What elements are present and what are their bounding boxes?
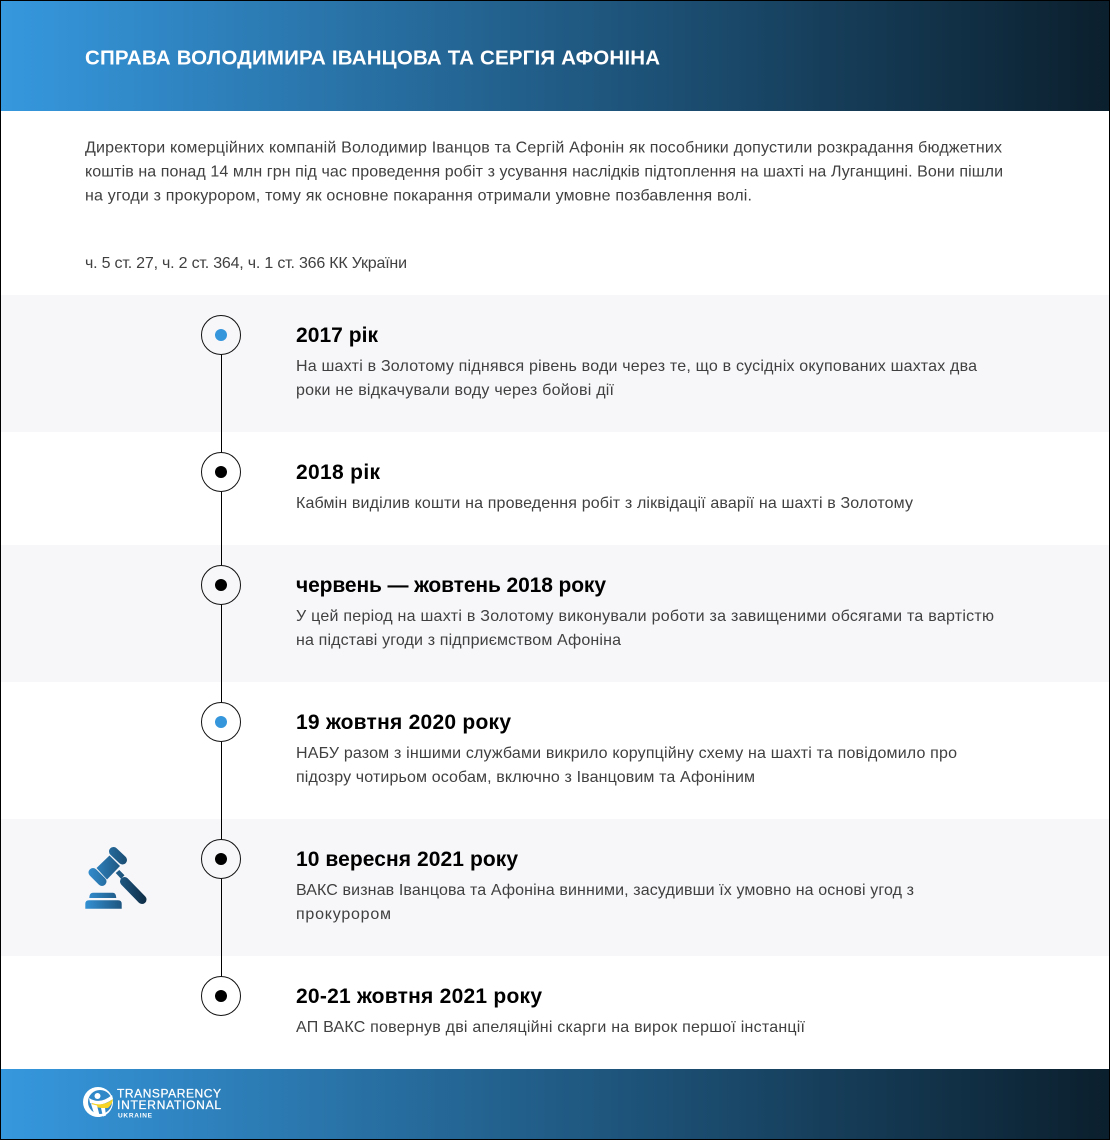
intro paragraph: Директори комерційних компаній Володимир Іванцов та Сергій Афонін як пособники допустили розкрадання бюджетних — [85, 140, 1002, 156]
timeline marker: 2017 — [202, 316, 240, 354]
footer band — [0, 1069, 1110, 1139]
event: 10 September 2021: прокурором — [296, 906, 391, 923]
logo: Transparency International Ukraine: UKRAINE — [118, 1112, 153, 1120]
event: 19 October 2020: НАБУ разом з іншими службами викрило корупційну схему на шахті та повідомило про — [296, 745, 957, 762]
event: 2017: 2017 рік — [296, 324, 378, 347]
event: 2018: 2018 рік — [296, 461, 380, 484]
row background: June-October 2018 — [0, 545, 1110, 682]
event: 2017: роки не відкачували воду через бойові дії — [296, 382, 615, 399]
row background: 10 September 2021 — [0, 819, 1110, 956]
event: June-October 2018: У цей період на шахті в Золотому виконували роботи за завищеними обсягами та вартістю — [296, 608, 994, 625]
logo: Transparency International Ukraine: TRANSPARENCY — [117, 1086, 221, 1100]
icon: judge gavel — [85, 852, 142, 909]
event: 20-21 October 2021 — [296, 985, 806, 1036]
logo: Transparency International Ukraine — [83, 1086, 221, 1120]
event: 19 October 2020: підозру чотирьом особам, включно з Іванцовим та Афоніним — [296, 769, 755, 786]
timeline marker: 2018 — [202, 452, 240, 492]
timeline marker: June-October 2018 — [202, 566, 240, 604]
event: 2018: Кабмін виділив кошти на проведення робіт з ліквідації аварії на шахті в Золотому — [296, 495, 913, 512]
event: June-October 2018 — [296, 574, 994, 649]
row background: 2017 — [0, 295, 1110, 432]
event: 10 September 2021 — [296, 848, 914, 923]
logo: Transparency International Ukraine: INTERNATIONAL — [117, 1098, 221, 1112]
timeline vertical line — [220, 335, 222, 996]
event: 2017: На шахті в Золотому піднявся рівень води через те, що в сусідніх окупованих шахтах два — [296, 358, 977, 375]
timeline marker: 19 October 2020 — [202, 702, 240, 742]
event: June-October 2018: червень — жовтень 2018 року — [296, 574, 606, 597]
event: 19 October 2020 — [296, 711, 957, 786]
timeline marker: 10 September 2021 — [202, 840, 240, 878]
event: 20-21 October 2021: АП ВАКС повернув дві апеляційні скарги на вирок першої інстанції — [296, 1019, 806, 1036]
timeline marker: 20-21 October 2021 — [202, 976, 240, 1016]
event: 10 September 2021: ВАКС визнав Іванцова та Афоніна винними, засудивши їх умовно на основі угод з — [296, 882, 914, 899]
event: 20-21 October 2021: 20-21 жовтня 2021 року — [296, 985, 542, 1008]
intro paragraph: на угоди з прокурором, тому як основне покарання отримали умовне позбавлення волі. — [85, 188, 752, 204]
logo globe — [83, 1087, 113, 1117]
event: 2017 — [296, 324, 977, 399]
event: 2018 — [296, 461, 913, 512]
title: СПРАВА ВОЛОДИМИРА ІВАНЦОВА ТА СЕРГІЯ АФОНІНА — [85, 46, 660, 70]
header band — [0, 0, 1110, 111]
intro paragraph — [85, 140, 1003, 204]
legal articles: ч. 5 ст. 27, ч. 2 ст. 364, ч. 1 ст. 366 КК України — [85, 255, 407, 272]
event: 19 October 2020: 19 жовтня 2020 року — [296, 711, 511, 734]
event: June-October 2018: на підставі угоди з підприємством Афоніна — [296, 632, 621, 649]
event: 10 September 2021: 10 вересня 2021 року — [296, 848, 518, 871]
intro paragraph: коштів на понад 14 млн грн під час проведення робіт з усування наслідків підтоплення на шахті на Луганщині. Вони пішли — [85, 164, 1003, 180]
